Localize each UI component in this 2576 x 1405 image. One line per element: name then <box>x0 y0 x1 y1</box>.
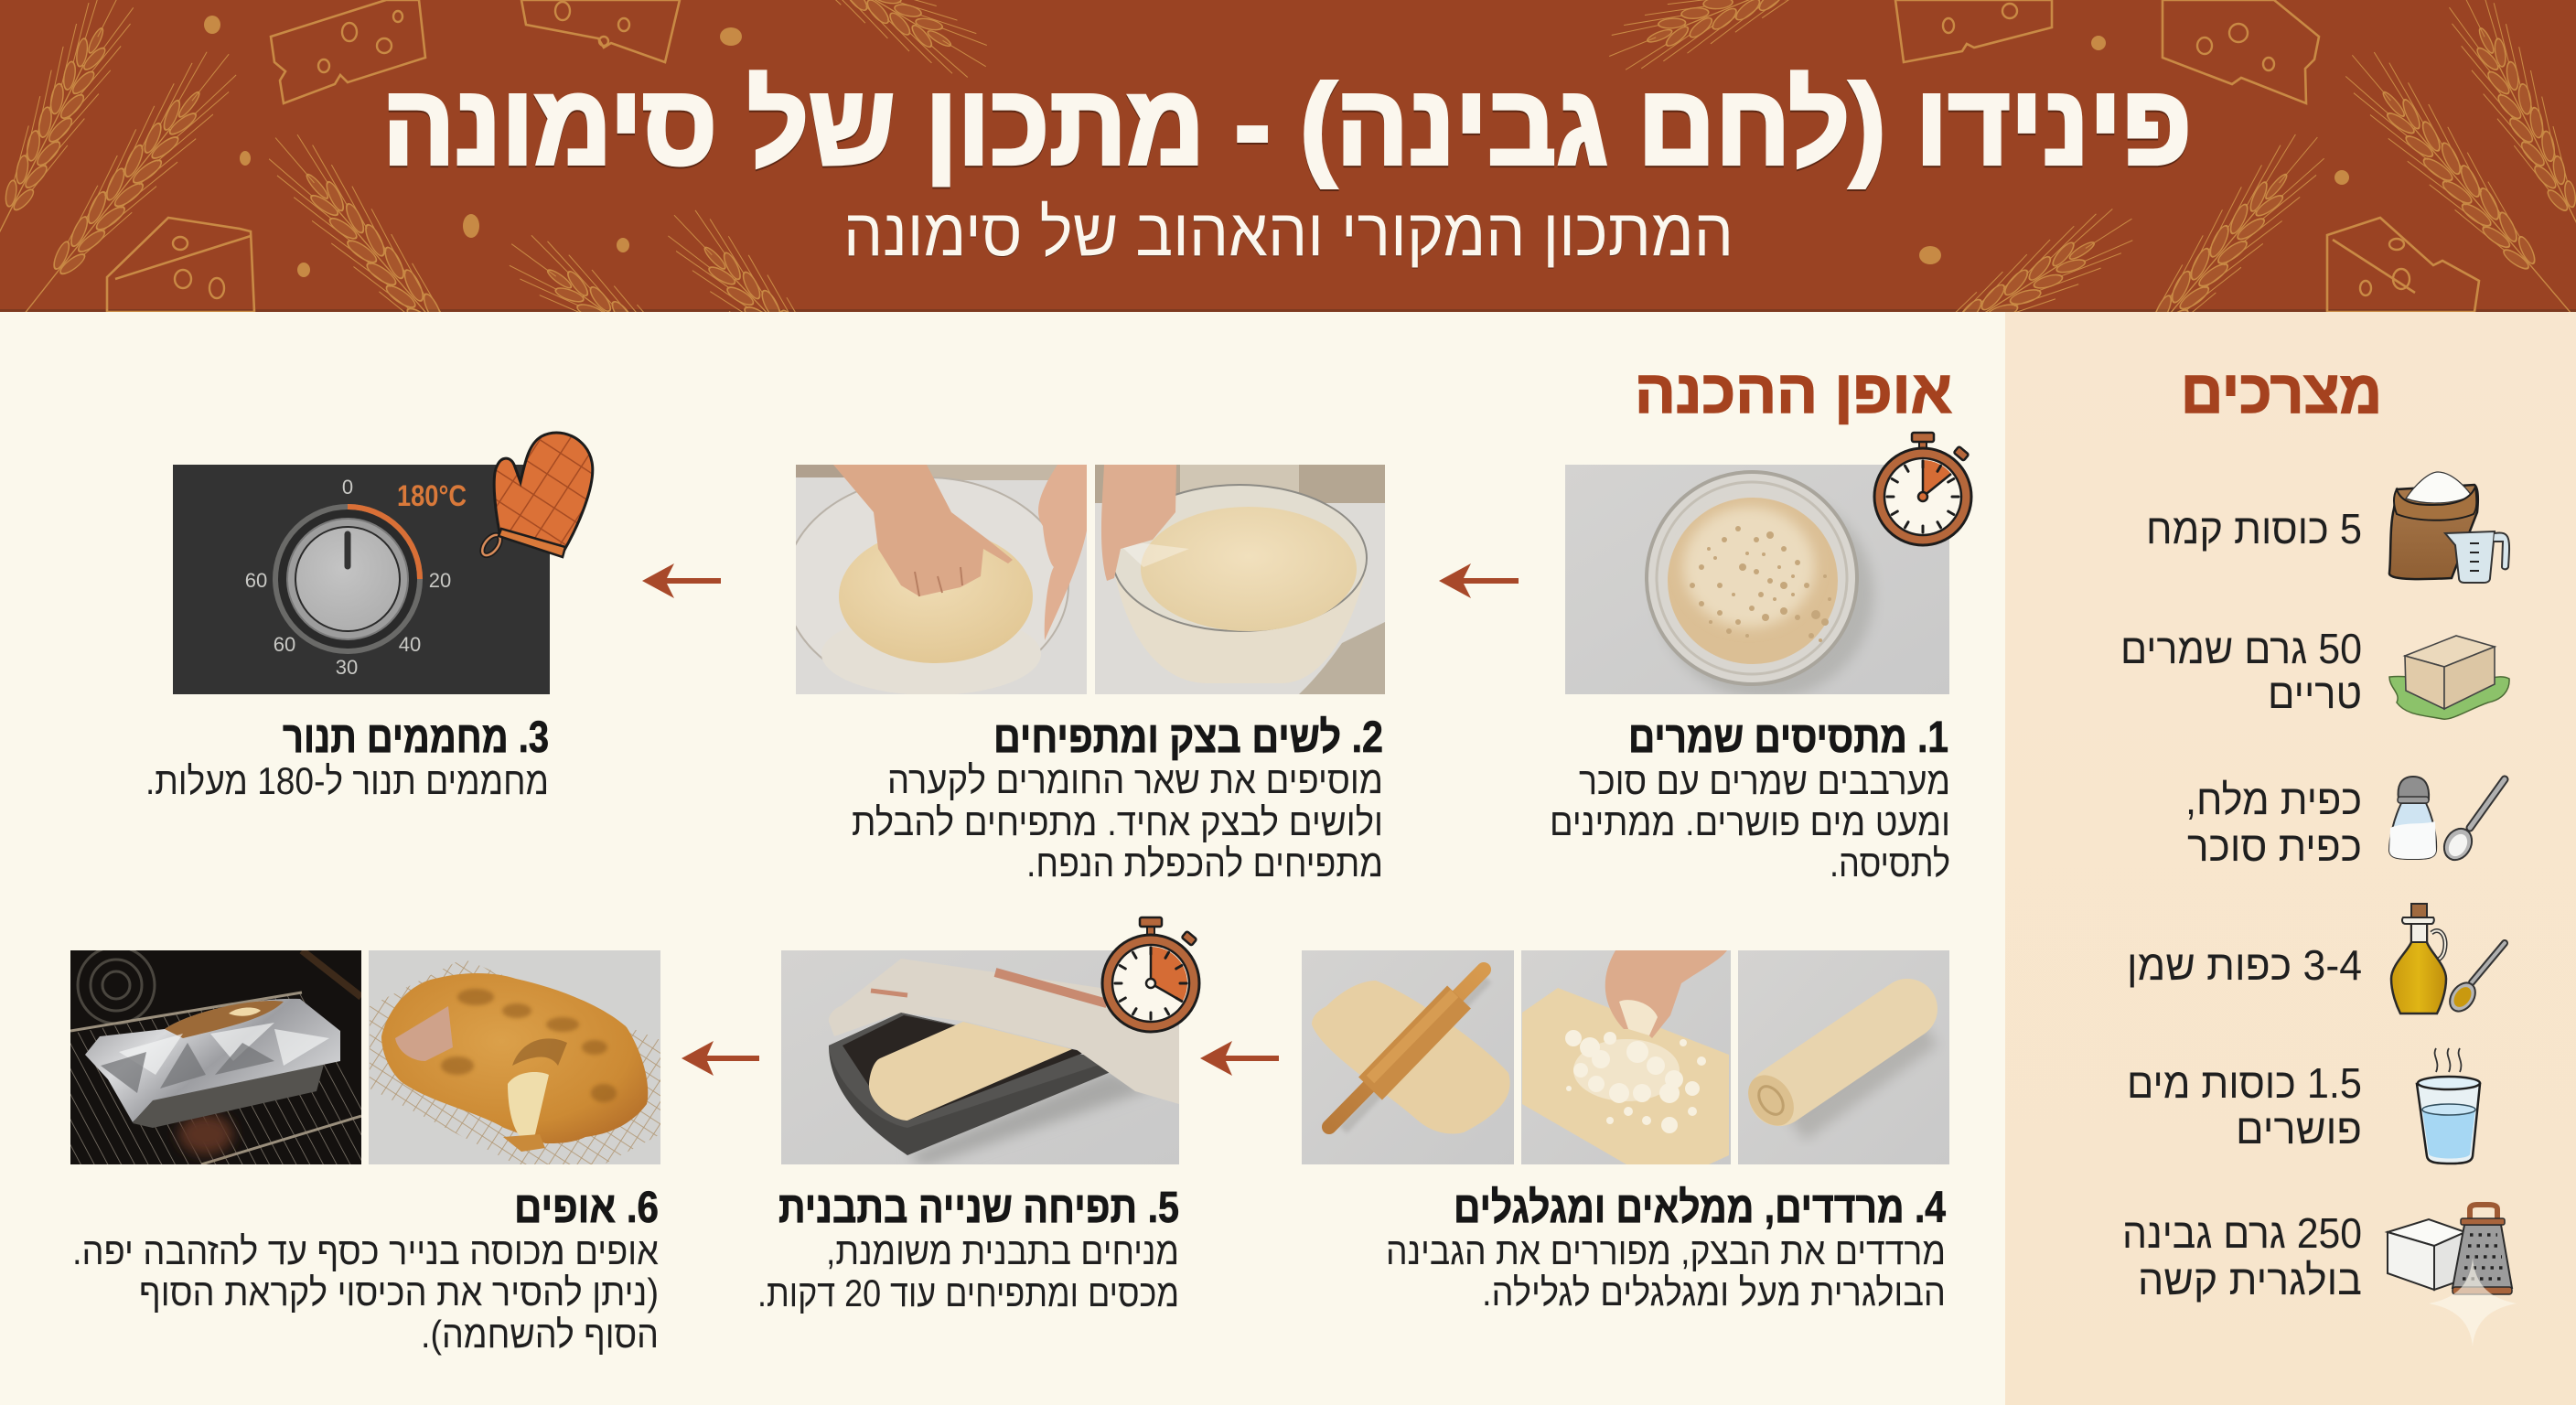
ingredient: oil <box>2127 904 2505 1016</box>
ingredient: yeast <box>2120 625 2509 719</box>
step 5 text: מכסים ומתפיחים עוד 20 דקות. <box>757 1271 1179 1314</box>
panel: step 1 <box>1550 433 1971 885</box>
ingredient: oil: 3-4 כפות שמן <box>2127 941 2362 989</box>
ingredient: cheese and grater <box>2122 1205 2512 1303</box>
ingredient: water: פושרים <box>2236 1105 2362 1153</box>
arrow: step 5 to 6 <box>682 1041 759 1076</box>
step 6 text: הסוף להשחמה). <box>421 1313 659 1356</box>
ingredient: water <box>2127 1048 2480 1164</box>
step 1 text: 1. מתסיסים שמרים <box>1628 713 1948 762</box>
panel: step 2 <box>785 465 1385 885</box>
icon: stopwatch <box>1874 433 1971 545</box>
watermark sparkle <box>2429 1258 2517 1346</box>
arrow: step 1 to 2 <box>1439 563 1519 598</box>
step 4 text: 4. מרדדים, ממלאים ומגלגלים <box>1454 1184 1946 1232</box>
ingredient: yeast: 50 גרם שמרים <box>2120 625 2362 672</box>
illustration: oven dial: 60 <box>274 633 295 656</box>
icon: stopwatch <box>1102 917 1199 1032</box>
panel: step 4 <box>1302 950 1949 1314</box>
photo: rolling dough <box>1302 950 1514 1164</box>
panel: step 3 <box>145 433 593 802</box>
heading: preparation method: אופן ההכנה <box>1635 358 1952 425</box>
subtitle: המתכון המקורי והאהוב של סימונה <box>843 196 1733 270</box>
photo: dough in loaf pan under towel <box>781 950 1179 1164</box>
step 1 text: ומעט מים פושרים. ממתינים <box>1550 800 1950 843</box>
illustration: oven dial <box>173 465 550 694</box>
ingredient: yeast: טריים <box>2268 670 2362 717</box>
step 3 text: 3. מחממים תנור <box>283 713 549 762</box>
photo: foaming yeast in bowl <box>1565 465 1949 694</box>
ingredient: flour: 5 כוסות קמח <box>2146 505 2362 552</box>
step 5 text: מניחים בתבנית משומנת, <box>826 1229 1179 1272</box>
photo: kneading dough <box>796 465 1087 694</box>
step 6 text: (ניתן להסיר את הכיסוי לקראת הסוף <box>139 1271 659 1314</box>
ingredient: salt and sugar: כפית מלח, <box>2185 776 2362 823</box>
panel: ingredients sidebar <box>2005 312 2576 1405</box>
panel: step 5 <box>757 917 1199 1314</box>
arrow: step 2 to 3 <box>642 563 721 598</box>
step 4 text <box>1386 1184 1946 1314</box>
ingredient: salt and sugar: כפית סוכר <box>2187 822 2362 870</box>
illustration: oven dial: 180°C <box>397 479 467 512</box>
step 2 text: מתפיחים להכפלת הנפח. <box>1026 842 1383 885</box>
step 4 text: הבולגרית מעל ומגלגלים לגלילה. <box>1482 1271 1946 1314</box>
panel: step 6 <box>70 947 660 1356</box>
step 3 text <box>145 713 549 802</box>
photo: sprinkling cheese <box>1521 950 1731 1164</box>
ingredient: cheese and grater: 250 גרם גבינה <box>2122 1209 2362 1257</box>
step 4 text: מרדדים את הבצק, מפוררים את הגבינה <box>1386 1229 1946 1272</box>
illustration: oven dial: 0 <box>342 476 353 499</box>
step 2 text: מוסיפים את שאר החומרים לקערה <box>887 758 1383 801</box>
photo: dough rising under wrap <box>1095 465 1385 694</box>
panel: header banner <box>0 0 2576 312</box>
step 2 text: ולושים לבצק אחיד. מתפיחים להבלת <box>852 800 1383 843</box>
illustration: oven dial: 20 <box>429 569 451 592</box>
photo: baked loaf on rack <box>369 950 660 1164</box>
ingredient: cheese and grater: בולגרית קשה <box>2138 1256 2362 1303</box>
icon: oven mitt <box>478 433 593 559</box>
illustration: oven dial: 30 <box>336 656 358 679</box>
step 3 text: מחממים תנור ל-180 מעלות. <box>145 759 549 802</box>
title: פינידו (לחם גבינה) - מתכון של סימונה <box>382 62 2192 188</box>
step 5 text <box>757 1184 1179 1314</box>
arrow: step 4 to 5 <box>1200 1041 1279 1076</box>
illustration: oven dial: 60 <box>245 569 267 592</box>
step 6 text: 6. אופים <box>514 1184 659 1232</box>
step 5 text: 5. תפיחה שנייה בתבנית <box>778 1184 1179 1232</box>
ingredient: flour <box>2146 472 2509 583</box>
step 1 text <box>1550 713 1950 885</box>
step 2 text <box>852 713 1383 885</box>
ingredient: water: 1.5 כוסות מים <box>2127 1059 2362 1107</box>
step 6 text: אופים מכוסה בנייר כסף עד להזהבה יפה. <box>72 1229 659 1272</box>
photo: foil-covered pan in oven <box>70 950 361 1164</box>
step 6 text <box>72 1184 659 1356</box>
step 1 text: לתסיסה. <box>1830 842 1950 885</box>
step 2 text: 2. לשים בצק ומתפיחים <box>993 713 1383 762</box>
step 1 text: מערבבים שמרים עם סוכר <box>1579 759 1950 802</box>
heading: ingredients: מצרכים <box>2181 358 2382 425</box>
photo: rolled dough log <box>1738 950 1949 1164</box>
illustration: oven dial: 40 <box>399 633 421 656</box>
ingredient: salt and sugar <box>2185 776 2505 870</box>
